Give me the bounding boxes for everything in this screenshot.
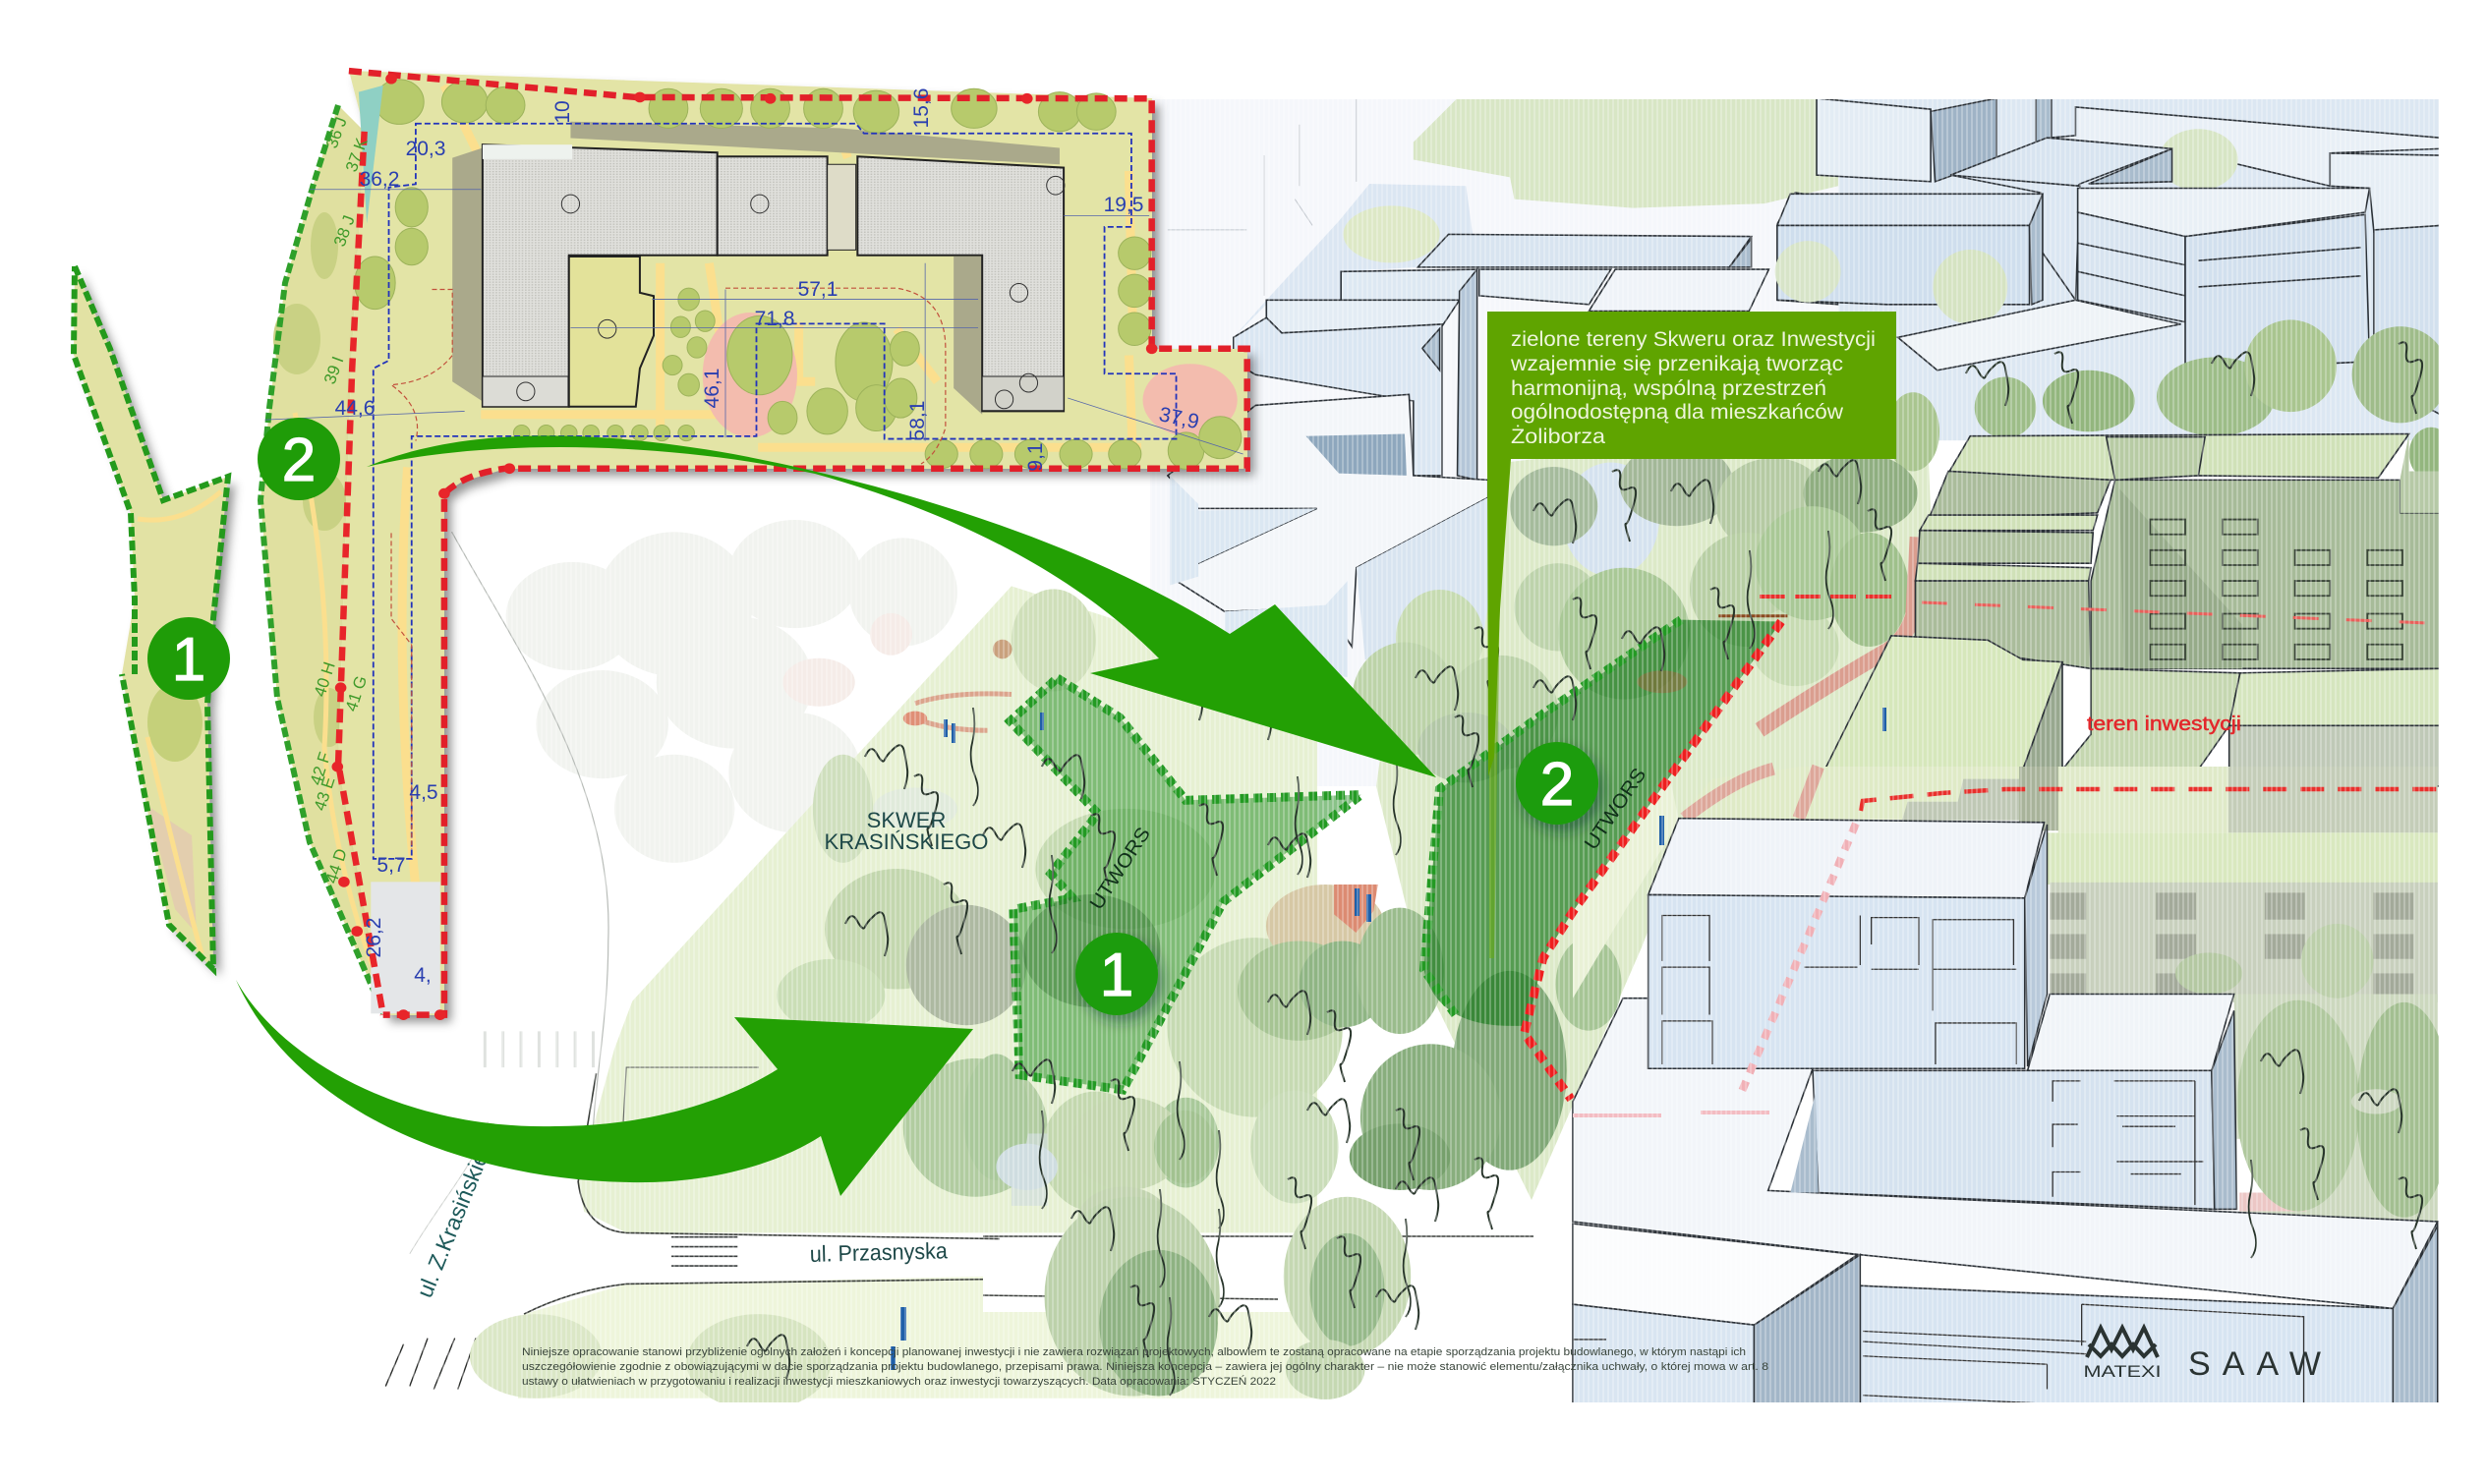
- plan dimensions: 4,: [414, 964, 432, 987]
- callout: green note: ogólnodostępną dla mieszkańców: [1511, 401, 1844, 424]
- plan point labels: 39 I: [320, 354, 347, 386]
- background trees: [1352, 442, 1839, 782]
- disclaimer text: [522, 1346, 1768, 1388]
- plan dimensions: 46,1: [701, 369, 723, 408]
- label: ul. Krasińskiego: ul. Z.Krasińskiego: [412, 1125, 502, 1301]
- disclaimer text: ustawy o ułatwieniach w przygotowaniu i realizacji inwestycji mieszkaniowych oraz inwestycji towarzyszących. Data opracowania: STYCZEŃ 2022: [522, 1375, 1276, 1388]
- callout: green note: [1487, 312, 1896, 958]
- label: Skwer Krasińskiego: [824, 808, 989, 854]
- plan dimensions: 10: [551, 100, 574, 124]
- arrow: utwór 2 to map: [367, 435, 1436, 777]
- callout: green note: harmonijną, wspólną przestrzeń: [1511, 377, 1826, 400]
- plan point labels: 36 J: [322, 115, 351, 150]
- panel: site plan: [264, 71, 1247, 1020]
- label: teren inwestycji: teren inwestycji: [2087, 713, 2241, 735]
- plan point labels: 42 F: [307, 750, 334, 787]
- panel: site strip 1: [74, 266, 228, 969]
- plan dimensions: 19,5: [1104, 194, 1143, 216]
- road edges: [983, 1236, 1533, 1299]
- buildings: upper left group: [1150, 98, 1838, 786]
- callout: green note: Żoliborza: [1511, 426, 1605, 448]
- plan dimensions: 26,2: [363, 918, 385, 957]
- plan point labels: 38 J: [330, 213, 359, 249]
- callout: green note: zielone tereny Skweru oraz Inwestycji: [1511, 328, 1876, 351]
- panel: site strip 2: [260, 105, 383, 1013]
- arrow: utwór 1 to map: [236, 980, 973, 1196]
- stripe texture: [384, 99, 2439, 1402]
- pedestrian figures: [891, 708, 1886, 1370]
- logo: Matexi: [2084, 1328, 2161, 1381]
- investment boundary lines: [1573, 597, 2439, 1115]
- badge: 2 on plan: 2: [282, 427, 316, 494]
- plan dimensions: 71,8: [755, 308, 794, 330]
- badge: 1 on map: [1075, 933, 1158, 1015]
- plan point labels: 37 K: [342, 135, 372, 174]
- logo: Matexi: MATEXI: [2084, 1362, 2161, 1381]
- forest base: [1376, 413, 1935, 1200]
- plan point labels: 44 D: [322, 846, 351, 885]
- tree outlines: [747, 342, 2422, 1396]
- green investment buildings: [1756, 319, 2453, 786]
- logo: SAAW: SAAW: [2188, 1345, 2321, 1383]
- badge: 2 on map: 2: [1540, 751, 1574, 819]
- badge: 1 on strip: 1: [172, 626, 205, 694]
- disclaimer text: Niniejsze opracowanie stanowi przybliżenie ogólnych założeń i koncepcji planowanej inwestycji i nie zawiera rozwiązań projektowych, albowiem te zostaną opracowane na etapie sporządzania projektu budowlanego, w którym nastąpi ich: [522, 1346, 1746, 1358]
- road white band: [983, 1274, 1290, 1312]
- zone: utwór 1: [1011, 678, 1361, 1090]
- park base, road and faded zone: [385, 520, 1317, 1410]
- label: Utwór 2: UTWORS: [1581, 765, 1650, 854]
- badge: 1 on strip: [147, 617, 230, 700]
- label: Skwer Krasińskiego: KRASIŃSKIEGO: [824, 829, 989, 854]
- disclaimer text: uszczegółowienie zgodnie z obowiązującymi w dacie sporządzania projektu budowlanego, przepisami prawa. Niniejsza koncepcja – zawiera jej ogólny charakter – nie może stanowić elementu/załącznika uchwały, o której mowa w art. 8: [522, 1361, 1768, 1373]
- plan dimensions: 37,9: [1157, 403, 1201, 433]
- plan details: [264, 71, 1247, 1020]
- central and lower trees: [963, 885, 1622, 1399]
- plan dimensions: 57,1: [798, 278, 838, 301]
- plan point labels: [307, 115, 372, 885]
- badge: 2 on map: [1516, 742, 1598, 825]
- plan point labels: 43 E: [311, 774, 339, 813]
- label: Utwór 1: UTWORS: [1086, 824, 1155, 914]
- plan dimensions: 44,6: [335, 397, 375, 420]
- plan point labels: 41 G: [342, 673, 371, 713]
- zone: utwór 2: [1424, 616, 1787, 1100]
- plan dimensions: 20,3: [406, 138, 445, 160]
- plan dimensions: 36,2: [360, 168, 399, 191]
- label: ul. Przasnyska: ul. Przasnyska: [809, 1237, 948, 1267]
- callout: green note: wzajemnie się przenikają tworząc: [1510, 353, 1843, 375]
- map: aerial illustration background: [384, 98, 2453, 1410]
- plan dimensions: [335, 88, 1201, 987]
- badge: 2 on plan: [258, 418, 340, 500]
- plan dimensions: 9,1: [1024, 442, 1047, 472]
- plan dimensions: 5,7: [376, 854, 406, 877]
- plan point labels: 40 H: [311, 659, 339, 699]
- label: Skwer Krasińskiego: SKWER: [867, 808, 946, 832]
- plan dimensions: 15,6: [910, 88, 933, 128]
- plan dimensions: 4,5: [409, 781, 438, 804]
- lower buildings and trees: [1573, 767, 2452, 1403]
- badge: 1 on map: 1: [1100, 942, 1133, 1009]
- buildings: upper right group: [1775, 98, 2440, 440]
- plan base: [338, 71, 1247, 1015]
- plan dimensions: 58,1: [906, 401, 929, 440]
